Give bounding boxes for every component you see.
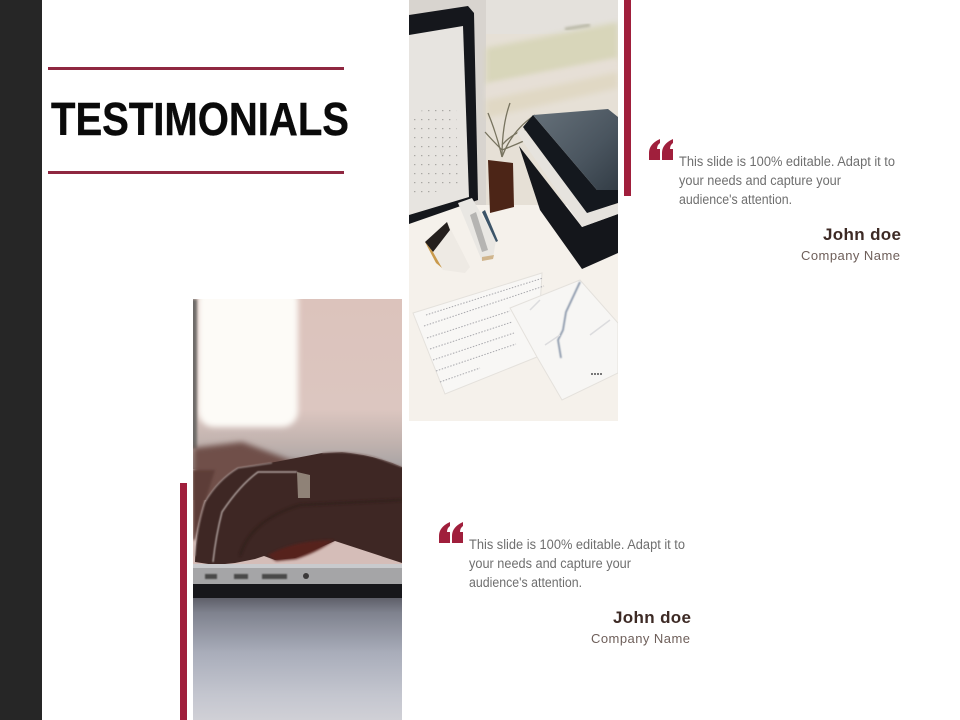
marble card [510, 280, 618, 400]
testimonial: bottom [439, 522, 691, 646]
name: John doe [823, 225, 901, 244]
quote text: audience's attention. [679, 192, 792, 207]
black box with textured lid [517, 109, 618, 269]
quote text: your needs and capture your [469, 556, 631, 571]
title block [48, 67, 349, 174]
quote text: This slide is 100% editable. Adapt it to [469, 537, 685, 552]
gold and glass objects [425, 198, 498, 273]
window view [486, 0, 618, 205]
picture frame [409, 6, 478, 224]
accent bar: top right [624, 0, 631, 196]
testimonial: top right [649, 139, 901, 263]
photo: desk with frame, plant, box and cards [409, 0, 618, 421]
ring [297, 472, 310, 498]
quote text: This slide is 100% editable. Adapt it to [679, 154, 895, 169]
blurred bright window [198, 285, 298, 427]
quote text: your needs and capture your [679, 173, 841, 188]
plant in wooden block [485, 103, 535, 213]
blurred background hill [193, 438, 299, 500]
title: TESTIMONIALS [51, 93, 349, 145]
quote text: audience's attention. [469, 575, 582, 590]
accent bar: bottom left [180, 483, 187, 720]
hand [193, 452, 402, 565]
photo: hands typing on laptop [190, 285, 402, 720]
company: Company Name [801, 248, 900, 263]
icon: quote mark [649, 139, 673, 160]
left sidebar [0, 0, 42, 720]
laptop [193, 564, 402, 599]
table surface [193, 598, 402, 720]
lined card [413, 273, 544, 394]
name: John doe [613, 608, 691, 627]
company: Company Name [591, 631, 690, 646]
icon: quote mark [439, 522, 463, 543]
